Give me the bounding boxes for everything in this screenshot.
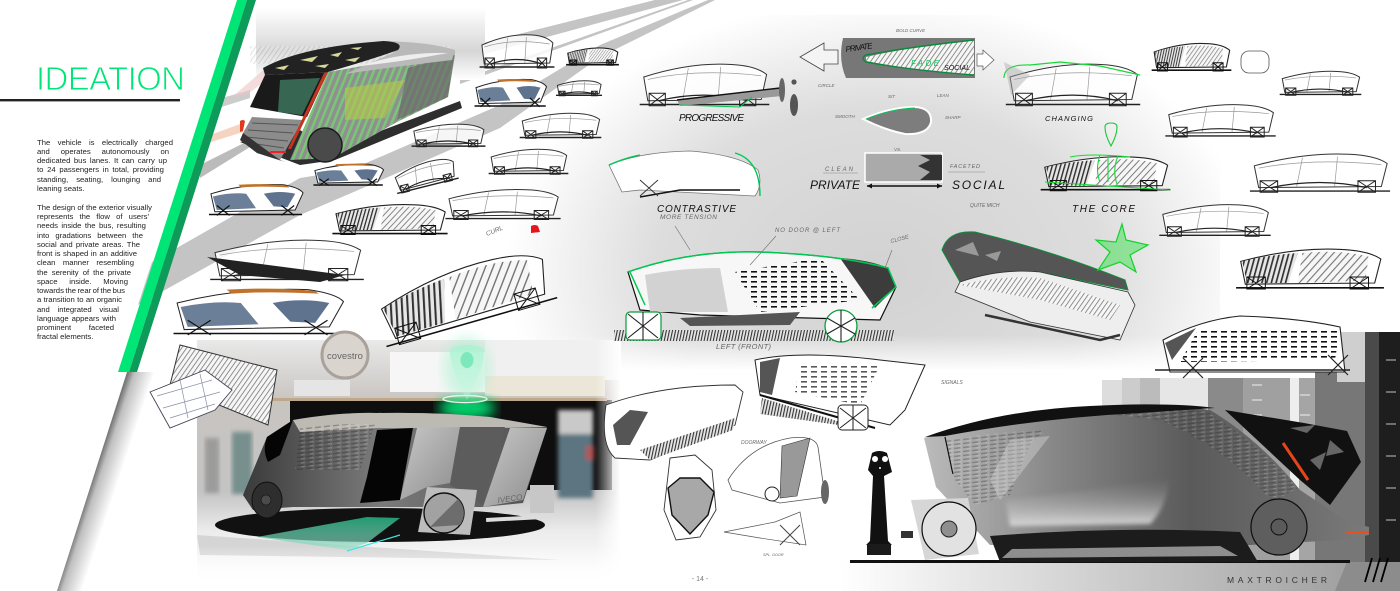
private social plan diagram	[800, 28, 994, 99]
clean vs faceted box: CLEAN	[825, 167, 854, 173]
body copy: manner	[63, 258, 89, 267]
body copy: needs	[37, 221, 58, 230]
green location pin	[439, 336, 495, 420]
large sketch	[371, 245, 558, 348]
body copy: The	[127, 240, 140, 249]
clean vs faceted box: PRIVATE	[810, 178, 861, 192]
page number: - 14 -	[692, 576, 709, 583]
body copy: bus	[113, 286, 125, 295]
sketch 11	[332, 205, 448, 234]
body copy: shaped	[63, 249, 88, 258]
dark green stripe	[129, 0, 256, 372]
sketch contrastive small: CONTRASTIVE	[657, 204, 736, 215]
body copy: private	[76, 240, 99, 249]
covestro logo	[322, 332, 368, 378]
body copy: of	[116, 212, 123, 221]
body copy: the	[100, 286, 111, 295]
body copy: vehicle	[58, 138, 82, 146]
body	[243, 413, 547, 510]
right sketch 1 dark	[1152, 43, 1231, 71]
decorated sketch mid: SIGNALS	[941, 380, 963, 386]
sketch progressive	[640, 64, 798, 124]
body copy: clean	[37, 258, 55, 267]
body copy: up	[158, 156, 167, 165]
big contrast sketch: CLOSE	[890, 234, 910, 245]
red marker	[531, 225, 540, 233]
front wheel box	[418, 487, 477, 535]
body side with green stripes	[290, 50, 455, 160]
private social plan diagram: LEAN	[937, 93, 950, 98]
body copy: and	[148, 174, 161, 184]
clean vs faceted box: SOCIAL	[952, 178, 1005, 192]
clean vs faceted box: FACETED	[950, 164, 980, 170]
sketch 13	[210, 240, 364, 281]
car perspective sketch	[604, 385, 743, 460]
private social plan diagram: SOCIAL	[944, 65, 970, 72]
body copy: the	[79, 212, 90, 221]
bottom-right floor panel	[840, 560, 1400, 591]
body copy: of	[83, 268, 89, 277]
faceted angled sketch: QUITE MICH	[970, 203, 1000, 209]
bottom-right background blocks	[1102, 332, 1400, 572]
teardrop plan: SHARP	[945, 115, 961, 120]
body copy: the	[132, 231, 143, 240]
front view	[1241, 51, 1269, 73]
left arrow	[800, 43, 838, 71]
body copy: an	[86, 295, 94, 304]
front wheel	[308, 128, 342, 162]
red light	[1283, 443, 1308, 480]
body copy: language	[37, 314, 69, 323]
body	[924, 406, 1369, 545]
ghost figures	[205, 438, 219, 493]
body copy: front	[37, 249, 52, 258]
body copy: the	[85, 221, 96, 230]
teardrop plan	[835, 107, 961, 134]
body copy: faceted	[89, 323, 114, 332]
clean vs faceted box	[810, 147, 1005, 192]
body copy: of	[77, 203, 84, 212]
body copy: resulting	[117, 221, 146, 230]
faceted roof	[263, 41, 400, 75]
sketch 5	[520, 113, 601, 138]
body copy: in	[91, 249, 97, 258]
body copy: total,	[112, 165, 129, 174]
windshield	[250, 72, 328, 117]
wireframe sketch	[150, 345, 277, 428]
wheel arch sketch	[724, 512, 806, 557]
body copy: social	[37, 240, 57, 249]
body copy: appears	[72, 314, 99, 323]
decorated sketch mid	[755, 355, 963, 430]
body copy: and	[37, 147, 50, 156]
door panel	[400, 427, 460, 500]
front-view sketch	[664, 455, 716, 540]
green floor light	[257, 517, 400, 550]
body copy: integrated	[57, 305, 92, 314]
body copy: can	[122, 156, 134, 165]
clean vs faceted box: VS.	[894, 147, 901, 152]
rear wheel	[252, 482, 282, 518]
body copy: autonomously	[102, 147, 150, 156]
title: IDEATION	[36, 60, 185, 97]
top-left bus render	[240, 41, 462, 165]
body copy: visual	[99, 305, 119, 314]
body copy: serenity	[52, 268, 79, 277]
body copy: visually	[127, 203, 152, 212]
body copy: to	[37, 165, 43, 174]
tail light	[1345, 531, 1369, 534]
silver roof side	[345, 41, 455, 74]
sketch 9 tilted	[392, 156, 459, 194]
body copy: charged	[145, 138, 173, 146]
private social plan diagram: PRIVATE	[845, 41, 874, 54]
right sketch 2	[1280, 71, 1361, 95]
door sketch: DOORWAY	[741, 440, 768, 446]
body copy: of	[93, 286, 99, 295]
skirt	[990, 530, 1258, 562]
window highlight	[990, 436, 1050, 500]
faceted angled sketch	[942, 203, 1148, 340]
small sketches left column: CURL	[485, 225, 505, 238]
covestro logo: covestro	[327, 351, 363, 362]
green diagonal stripe	[118, 0, 247, 372]
sketch 14 orange large	[174, 289, 343, 335]
body copy: users'	[129, 212, 149, 221]
body copy: space	[37, 277, 58, 286]
body copy: carry	[138, 156, 155, 165]
door sketch	[728, 437, 829, 504]
sketch contrastive small	[609, 151, 760, 221]
ground	[197, 535, 560, 560]
rear wheel	[1251, 499, 1307, 555]
body copy: prominent	[37, 323, 71, 332]
pin outline	[1105, 123, 1117, 146]
front floor	[243, 117, 303, 160]
body copy: the	[37, 268, 48, 277]
body copy: the	[93, 268, 104, 277]
front bumper	[486, 515, 552, 522]
body copy: is	[89, 138, 95, 146]
body copy: represents	[37, 212, 73, 221]
bottom-middle bus render	[215, 413, 554, 551]
green star	[1096, 224, 1148, 272]
body copy: providing	[133, 165, 164, 174]
big contrast sketch	[614, 226, 910, 351]
body copy: inside.	[69, 277, 91, 286]
diagonal road streaks	[138, 0, 715, 305]
body copy: is	[55, 249, 60, 258]
body copy: design	[52, 203, 75, 212]
bottom-middle bus render: IVECO	[497, 493, 523, 505]
body copy: The	[37, 138, 50, 146]
body copy: 24	[47, 165, 56, 174]
sketch 1	[480, 35, 554, 68]
body copy: fractal elements.	[37, 332, 93, 341]
sketch 12	[445, 190, 561, 220]
body copy: transition	[44, 295, 75, 304]
body copy: standing,	[37, 174, 68, 184]
front face	[483, 428, 547, 507]
body copy: organic	[97, 295, 122, 304]
big contrast sketch: NO DOOR @ LEFT	[775, 228, 841, 234]
body copy: Moving	[103, 277, 128, 286]
sketch 10 dark blue	[209, 184, 303, 215]
plan body	[841, 38, 975, 78]
right sketch 4	[1250, 154, 1390, 192]
body copy: private	[108, 268, 131, 277]
sketch contrastive small: MORE TENSION	[660, 214, 717, 221]
title rule	[0, 99, 180, 101]
lower highlight	[1005, 478, 1170, 526]
ground shadow	[215, 508, 545, 542]
body copy: the	[86, 203, 97, 212]
body copy: It	[114, 156, 118, 165]
body copy: in	[103, 165, 109, 174]
private social plan diagram: CIRCLE	[818, 83, 836, 88]
sketch progressive: PROGRESSIVE	[679, 113, 744, 124]
white left wedge and shadow	[57, 372, 175, 591]
bottom-middle render background	[197, 340, 621, 585]
body copy: inside	[61, 221, 81, 230]
body copy: passengers	[59, 165, 99, 174]
body copy: and	[37, 305, 50, 314]
right ghost bottle	[558, 410, 594, 498]
dark pattern sketch	[1155, 316, 1350, 378]
body copy: to	[77, 295, 84, 304]
body copy: electrically	[102, 138, 138, 146]
front wheel box	[911, 498, 979, 560]
body copy	[37, 138, 173, 341]
body copy: The	[37, 203, 50, 212]
sketch 3 blue	[474, 79, 546, 107]
right sketch 3	[1165, 105, 1276, 137]
body copy: a	[37, 295, 41, 304]
sketch 2	[566, 48, 619, 65]
body copy: leaning seats.	[37, 184, 84, 193]
sketch changing: CHANGING	[1045, 114, 1093, 123]
door	[360, 428, 413, 503]
body copy: flow	[96, 212, 110, 221]
private social plan diagram: FADE	[911, 59, 940, 68]
body copy: with	[102, 314, 116, 323]
private social plan diagram: SIT	[888, 94, 896, 99]
charging bollard	[866, 451, 892, 555]
right arrow	[977, 50, 994, 70]
slash mark	[1365, 558, 1388, 582]
sketch changing	[1004, 62, 1140, 123]
signature: MAXTROICHER	[1227, 575, 1327, 585]
sketch 6	[412, 124, 485, 147]
central grey backdrop	[480, 15, 1240, 371]
sketch 8 orange	[313, 164, 384, 186]
private social plan diagram: BOLD CURVE	[896, 28, 926, 33]
rear	[265, 420, 293, 462]
sketch the core	[1041, 123, 1170, 215]
right sketch 5	[1159, 205, 1271, 236]
right sketch 6	[1236, 249, 1384, 289]
body copy: into	[37, 231, 49, 240]
faceted rear	[1225, 410, 1361, 505]
body copy: dedicated	[37, 156, 70, 165]
body copy: additive	[110, 249, 137, 258]
body copy: towards	[37, 286, 64, 295]
body copy: lanes.	[90, 156, 110, 165]
body copy: exterior	[99, 203, 125, 212]
body copy: rear	[77, 286, 91, 295]
wheel arch sketch: SPL. DOOR	[763, 553, 784, 557]
body copy: and	[60, 240, 73, 249]
body copy: the	[65, 286, 76, 295]
body copy: seating,	[76, 174, 103, 184]
body copy: gradations	[55, 231, 91, 240]
body copy: between	[97, 231, 126, 240]
perforated bands	[945, 430, 1045, 505]
roof edge	[925, 404, 1215, 437]
body copy: operates	[61, 147, 91, 156]
sketch 7	[489, 149, 568, 174]
body copy: lounging	[111, 174, 140, 184]
body copy: bus,	[99, 221, 113, 230]
sketch the core: THE CORE	[1072, 204, 1135, 215]
body copy: bus	[74, 156, 86, 165]
teardrop plan: SMOOTH	[835, 114, 855, 119]
platform	[240, 101, 462, 165]
body copy: an	[99, 249, 108, 258]
body copy: on	[160, 147, 169, 156]
sketch 4	[556, 81, 602, 96]
grey shading behind top render	[232, 8, 485, 97]
small sketches left column	[174, 35, 619, 348]
big contrast sketch: LEFT (FRONT)	[716, 342, 772, 351]
body copy: resembling	[96, 258, 134, 267]
sketches right column	[1152, 43, 1390, 289]
body copy: areas.	[102, 240, 124, 249]
main bus render	[901, 404, 1369, 562]
